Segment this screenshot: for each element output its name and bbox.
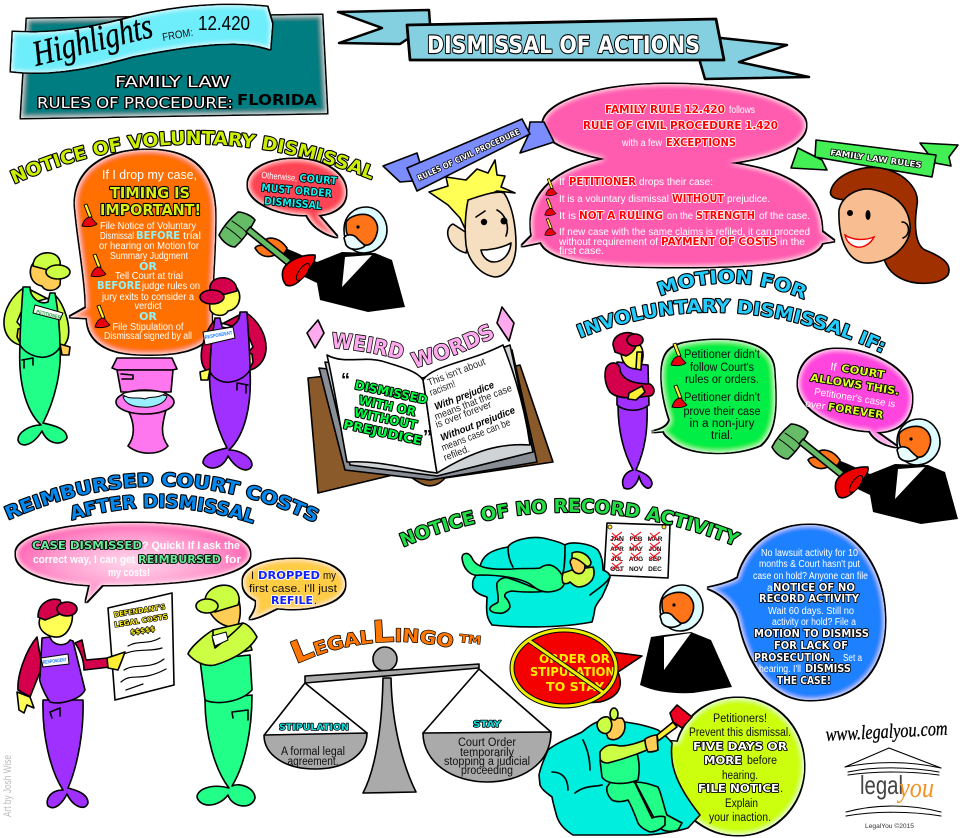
bottom bubble text: on the bbox=[667, 211, 693, 222]
green book title: WITH OR bbox=[357, 393, 417, 419]
copyright: LegalYou ©2015 bbox=[865, 822, 914, 830]
legal wordmark: legal bbox=[860, 770, 903, 800]
left pan: stipulation: STIPULATION bbox=[279, 723, 349, 733]
blue bubble text: a bbox=[767, 583, 773, 594]
blue bubble text: RECORD ACTIVITY bbox=[759, 593, 859, 605]
green bubble text: rules or orders. bbox=[685, 374, 759, 386]
orange bubble body: BEFORE bbox=[136, 230, 180, 242]
left pan: stipulation: A formal legal bbox=[281, 746, 345, 758]
panel: red court must order bubble bbox=[248, 159, 346, 237]
panel: pink family rule bubble bbox=[522, 84, 834, 267]
bottom bubble text: in the bbox=[780, 237, 805, 248]
left page bbox=[327, 355, 437, 473]
main title banner bbox=[338, 10, 809, 79]
refile bubble text: my bbox=[323, 570, 336, 582]
prevent dismissal text: MORE bbox=[704, 754, 742, 767]
blue bubble text: case on hold? Anyone can file bbox=[753, 571, 868, 582]
blue bubble text: months & Court hasn't put bbox=[759, 559, 860, 570]
red bubble text: Otherwise, bbox=[261, 170, 298, 183]
heading: legal lingo bbox=[290, 620, 482, 664]
arms-crossed petitioner figure bbox=[188, 585, 257, 806]
orange bubble body: OR bbox=[139, 310, 157, 323]
panel: orange timing bubble bbox=[70, 150, 215, 354]
icon: pink toilet bbox=[112, 358, 177, 453]
highlights ribbon bbox=[11, 5, 272, 73]
definition text on right page: With prejudice bbox=[433, 380, 496, 413]
document heading bbox=[112, 603, 170, 639]
green book title: DISMISSED bbox=[354, 378, 429, 407]
refile bubble text: REFILE bbox=[271, 594, 313, 607]
magenta bubble text: Petitioner's case is bbox=[813, 387, 896, 410]
left pan: stipulation: agreement. bbox=[288, 756, 338, 768]
green bubble text bbox=[684, 349, 761, 442]
thinking respondent figure bbox=[605, 333, 654, 489]
magenta bubble text: over bbox=[804, 398, 827, 413]
bottom bubble text: It is a voluntary dismissal bbox=[559, 194, 669, 205]
top bubble text: EXCEPTIONS bbox=[666, 137, 736, 149]
green bubble text: Petitioner didn't bbox=[684, 392, 761, 404]
no stay text: ORDER OR bbox=[539, 652, 610, 666]
calendar months: MAY bbox=[629, 546, 644, 553]
calendar months: JUN bbox=[648, 546, 662, 553]
icon: calendar with crossed months bbox=[604, 523, 670, 578]
orange bubble headline: IMPORTANT! bbox=[100, 201, 201, 219]
document heading: $$$$$ bbox=[130, 625, 156, 637]
blue bubble text bbox=[753, 548, 869, 687]
prevent dismissal text: . bbox=[780, 783, 783, 795]
plunger bullets bbox=[545, 178, 557, 235]
definition text on right page: Without prejudice bbox=[439, 405, 517, 444]
icon: blond man head bbox=[429, 160, 516, 277]
refile bubble text: . bbox=[314, 595, 317, 607]
florida: FLORIDA bbox=[237, 91, 317, 109]
refile bubble text bbox=[249, 569, 337, 607]
reimbursed bubble text bbox=[32, 540, 242, 579]
prevent dismissal text bbox=[689, 713, 791, 824]
from label: FROM: bbox=[161, 27, 194, 44]
right pan: stay: STAY bbox=[473, 720, 502, 730]
family law line: FAMILY LAW bbox=[115, 73, 230, 91]
bottom bubble text: without requirement of bbox=[558, 237, 658, 248]
blue bubble text: No lawsuit activity for 10 bbox=[761, 548, 858, 559]
definition text on right page bbox=[426, 357, 517, 464]
title text: DISMISSAL OF ACTIONS bbox=[427, 31, 700, 59]
reimbursed bubble text: correct way, I can get bbox=[33, 554, 135, 566]
panel: green involuntary reasons bubble bbox=[652, 340, 775, 453]
orange plungers bbox=[82, 204, 110, 328]
calendar months: OCT bbox=[610, 566, 624, 573]
respondent badge, pointing figure bbox=[41, 654, 69, 667]
bottom bubble text: prejudice. bbox=[727, 194, 770, 205]
bottom bubble text: It is bbox=[559, 211, 576, 222]
quote marks: ” bbox=[423, 427, 432, 447]
red bubble text bbox=[259, 169, 338, 213]
ribbon: rules of civil procedure bbox=[383, 119, 554, 191]
heading: weird words with diamonds: WORDS bbox=[410, 323, 494, 368]
right pan: stay: stopping a judicial bbox=[444, 756, 530, 768]
icon: open book with weird words bbox=[308, 345, 553, 493]
heading: motion for involuntary dismissal if bbox=[576, 268, 886, 354]
heading: reimbursed court costs: AFTER DISMISSAL bbox=[70, 493, 254, 524]
quote marks: “ bbox=[341, 370, 350, 390]
ribbon text: FAMILY LAW RULES bbox=[830, 148, 922, 170]
icon: person on couch with brush bbox=[539, 705, 700, 835]
prevent dismissal text: Prevent this dismissal. bbox=[689, 727, 791, 739]
scale post and beam bbox=[363, 678, 416, 793]
respondent badge, pointing figure: RESPONDENT bbox=[43, 657, 67, 666]
orange bubble body: Dismissal signed by all bbox=[104, 331, 192, 342]
rules of procedure line: RULES OF PROCEDURE: bbox=[37, 94, 233, 112]
blue bubble text: NOTICE OF NO bbox=[773, 582, 855, 594]
bottom bubble text: PETITIONER bbox=[569, 176, 636, 188]
bottom bubble text: STRENGTH bbox=[696, 210, 755, 222]
orange bubble body: trial bbox=[183, 231, 201, 242]
calendar months: AUG bbox=[629, 556, 643, 563]
refile bubble text: I bbox=[251, 570, 254, 582]
magenta bubble text: ALLOWS THIS. bbox=[809, 372, 900, 398]
right pan: stay: proceeding bbox=[461, 765, 513, 777]
refile bubble text: first case. I'll just bbox=[249, 583, 337, 595]
prevent dismissal text: hearing. bbox=[722, 770, 758, 782]
bottom bubble text: WITHOUT bbox=[672, 193, 725, 205]
reimbursed bubble text: ? Quick! If I ask the bbox=[142, 540, 240, 552]
right page bbox=[423, 345, 530, 473]
highlights script: Highlights bbox=[27, 5, 156, 74]
bottom bubble text: of the case. bbox=[759, 211, 810, 222]
red bubble text: COURT bbox=[299, 172, 338, 188]
pointing respondent figure bbox=[17, 599, 125, 808]
icon: woman head bbox=[830, 167, 949, 283]
calendar months: DEC bbox=[648, 566, 662, 573]
reimbursed bubble text: for bbox=[225, 554, 242, 566]
panel: yellow refile bubble bbox=[243, 559, 345, 619]
orange bubble body: File Notice of Voluntary bbox=[100, 221, 196, 232]
refile bubble text: DROPPED bbox=[258, 569, 320, 582]
ribbon: family law rules bbox=[791, 140, 958, 177]
orange bubble body: Summary Judgment bbox=[110, 251, 188, 262]
blue bubble text: THE CASE! bbox=[777, 675, 831, 687]
green bubble text: Petitioner didn't bbox=[684, 349, 761, 361]
orange bubble headline bbox=[100, 167, 201, 219]
magenta bubble text: If bbox=[829, 361, 838, 374]
bottom bubble text bbox=[558, 176, 810, 257]
no stay text: STIPULATION bbox=[530, 665, 615, 679]
heading: weird words with diamonds bbox=[306, 306, 515, 368]
calendar months: JAN bbox=[610, 536, 624, 543]
respondent badge: RESPONDENT bbox=[204, 330, 233, 341]
orange bubble headline: If I drop my case, bbox=[102, 167, 197, 182]
respondent badge bbox=[203, 327, 235, 345]
orange bubble body: judge rules on bbox=[141, 281, 200, 292]
orange bubble body bbox=[97, 221, 201, 342]
bottom bubble text: first case. bbox=[559, 246, 604, 257]
right pan: stay: Court Order bbox=[458, 737, 516, 749]
heading: legal lingo: LEGALLINGO bbox=[290, 620, 454, 664]
panel: highlights header bbox=[11, 5, 327, 118]
orange bubble body: jury exits to consider a bbox=[101, 292, 194, 303]
definition text on right page: This isn't about bbox=[426, 357, 487, 389]
calendar months: FEB bbox=[630, 536, 643, 543]
magenta bubble text bbox=[804, 358, 902, 424]
judge without gavel bbox=[640, 585, 732, 693]
prevent dismissal text: before bbox=[747, 755, 777, 767]
reimbursed bubble text: REIMBURSED bbox=[138, 554, 221, 566]
bottom bubble text: drops their case: bbox=[639, 177, 713, 188]
calendar months: SEP bbox=[648, 556, 662, 563]
document heading: LEGAL COSTS bbox=[114, 613, 168, 629]
icon: person sleeping on couch bbox=[462, 537, 610, 627]
green bubble text: follow Court's bbox=[690, 362, 754, 374]
petitioner badge bbox=[33, 305, 63, 321]
panel: magenta court allows bubble bbox=[798, 349, 912, 447]
no stay red bubble bbox=[512, 630, 642, 706]
orange bubble body: File Stipulation of bbox=[112, 322, 184, 333]
green bubble text: in a non-jury bbox=[690, 418, 755, 430]
blue bubble text: PROSECUTION. bbox=[754, 652, 834, 664]
prevent dismissal text: FILE NOTICE bbox=[698, 782, 779, 795]
reimbursed bubble text: CASE DISMISSED bbox=[32, 540, 142, 552]
heading: notice of no record activity: NOTICE OF NO RECORD ACTIVITY bbox=[398, 498, 742, 548]
teal header panel bbox=[21, 15, 327, 118]
artist credit: Art by Josh Wise bbox=[2, 755, 14, 817]
green plungers bbox=[671, 343, 687, 408]
judge with gavel, right bbox=[772, 419, 958, 524]
prevent dismissal text: Petitioners! bbox=[713, 713, 767, 725]
green book title: PREJUDICE bbox=[342, 417, 423, 448]
ribbon text: RULES OF CIVIL PROCEDURE bbox=[416, 127, 521, 183]
prevent dismissal text: Explain bbox=[725, 798, 758, 810]
definition text on right page: means case can be bbox=[440, 417, 513, 454]
magenta bubble text: FOREVER bbox=[827, 401, 884, 422]
green bubble text: prove their case bbox=[684, 406, 760, 418]
heading: motion for involuntary dismissal if: INVOLUNTARY DISMISSAL IF: bbox=[576, 298, 886, 354]
orange bubble body: or hearing on Motion for bbox=[99, 241, 200, 252]
bottom bubble text: If new case with the same claims is refiled, it can proceed bbox=[559, 227, 810, 238]
heading: reimbursed court costs: REIMBURSED COURT COSTS bbox=[3, 472, 320, 522]
red bubble text: DISMISSAL bbox=[264, 195, 323, 212]
green book title: WITHOUT bbox=[353, 405, 419, 433]
rule number: 12.420 bbox=[198, 13, 250, 35]
definition text on right page: refiled. bbox=[442, 444, 471, 464]
top bubble text bbox=[583, 104, 778, 149]
orange bubble body: Tell Court at trial bbox=[115, 271, 183, 282]
prevent dismissal text: your inaction. bbox=[709, 812, 771, 824]
blue bubble text: DISMISS bbox=[805, 663, 851, 675]
top bubble text: follows bbox=[729, 105, 755, 116]
no stay text bbox=[530, 652, 615, 694]
calendar months bbox=[610, 536, 663, 573]
chart: balance scale bbox=[264, 647, 551, 793]
orange bubble body: verdict bbox=[134, 301, 162, 312]
orange bubble body: Dismissal bbox=[100, 231, 134, 242]
bottom bubble text: PAYMENT OF COSTS bbox=[661, 236, 777, 248]
prevent dismissal text: FIVE DAYS OR bbox=[693, 740, 788, 753]
left pan: stipulation bbox=[264, 723, 367, 769]
blue bubble text: activity or hold? File a bbox=[772, 617, 856, 628]
reimbursed bubble text: my costs! bbox=[108, 567, 150, 579]
definition text on right page: racism! bbox=[428, 379, 457, 399]
green book title bbox=[342, 377, 432, 448]
calendar months: NOV bbox=[629, 566, 644, 573]
top bubble text: with a few bbox=[621, 138, 663, 149]
bottom bubble text: NOT A RULING bbox=[579, 210, 663, 222]
right pan: stay bbox=[423, 720, 551, 782]
respondent figure bbox=[200, 278, 266, 470]
definition text on right page: is over forever bbox=[434, 399, 494, 431]
calendar months: MAR bbox=[648, 536, 663, 543]
heading: weird words with diamonds: WEIRD bbox=[332, 332, 404, 359]
panel: blue court warning bubble bbox=[708, 525, 885, 700]
blue bubble text: Set a bbox=[843, 653, 862, 664]
document heading: DEFENDANT'S bbox=[113, 603, 166, 619]
orange bubble headline: TIMING IS bbox=[110, 184, 190, 202]
orange bubble body: OR bbox=[139, 260, 157, 273]
heading: notice of voluntary dismissal: NOTICE OF VOLUNTARY DISMISSAL bbox=[9, 130, 374, 184]
bottom bubble text: If bbox=[559, 177, 565, 188]
judge with gavel, top bbox=[219, 207, 405, 312]
you wordmark: you bbox=[896, 773, 934, 804]
blue bubble text: FOR LACK OF bbox=[774, 640, 848, 652]
panel: pink reimbursed bubble bbox=[16, 523, 250, 602]
blue bubble text: MOTION TO DISMISS bbox=[754, 628, 869, 640]
right pan: stay: temporarily bbox=[460, 747, 514, 759]
definition text on right page: means that the case bbox=[433, 383, 514, 423]
trademark: TM bbox=[459, 632, 482, 647]
document: defendant's legal costs bbox=[108, 593, 174, 700]
orange bubble body: BEFORE bbox=[97, 280, 141, 292]
calendar months: JUL bbox=[611, 556, 623, 563]
red bubble text: MUST ORDER bbox=[261, 182, 332, 200]
blue bubble text: Wait 60 days. Still no bbox=[768, 606, 854, 617]
heading: motion for involuntary dismissal if: MOTION FOR bbox=[656, 268, 807, 300]
top bubble text: FAMILY RULE 12.420 bbox=[605, 104, 725, 116]
logo: legalyou bbox=[825, 718, 948, 830]
prohibition ring bbox=[512, 630, 616, 706]
petitioner badge: PETITIONER bbox=[36, 309, 62, 321]
magenta bubble text: COURT bbox=[840, 363, 886, 382]
petitioner figure bbox=[4, 253, 70, 445]
quote marks bbox=[341, 370, 432, 447]
no stay text: TO STAY bbox=[546, 680, 604, 694]
calendar months: APR bbox=[610, 546, 624, 553]
top bubble text: RULE OF CIVIL PROCEDURE 1.420 bbox=[583, 120, 778, 132]
green bubble text: trial. bbox=[711, 430, 733, 442]
blue bubble text: hearing. I'll bbox=[759, 664, 801, 675]
panel: yellow-green prevent dismissal bubble bbox=[662, 698, 804, 835]
